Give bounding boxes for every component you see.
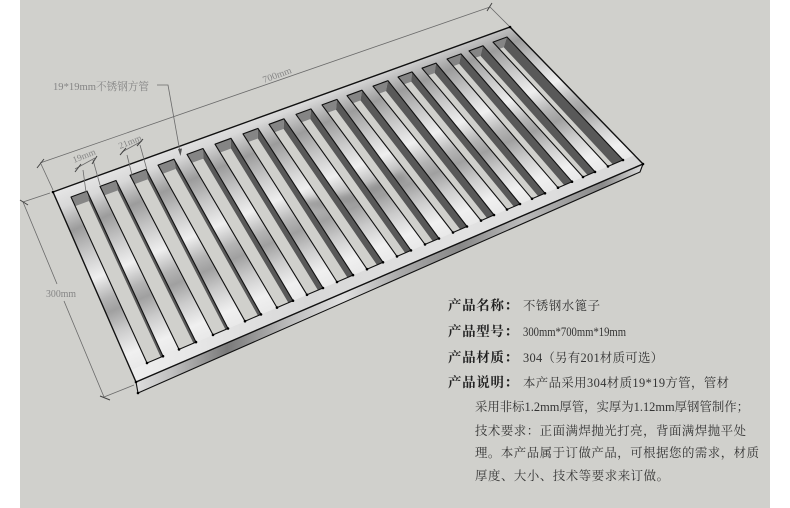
slot 17 (493, 37, 623, 166)
callout: tube size (53, 79, 182, 156)
slot 5 (187, 148, 293, 308)
slot 8 (269, 119, 383, 269)
grate top face (53, 27, 643, 382)
dimension: 300mm: 300mm (46, 289, 76, 300)
spec: model: 300mm*700mm*19mm (523, 325, 626, 339)
slot 15 (447, 54, 572, 188)
slot 6 (215, 138, 323, 295)
dimension: 19mm: 19mm (71, 147, 97, 165)
slot 4 (158, 159, 261, 321)
spec: model: 产品型号： (448, 323, 518, 339)
spec: description: 产品说明： (448, 374, 518, 390)
slot 7 (243, 128, 353, 282)
slot 16 (469, 46, 595, 177)
spec: name: 产品名称： (448, 297, 518, 313)
spec: name (448, 297, 600, 313)
slot 1 (71, 191, 163, 363)
grate corner points (53, 27, 643, 393)
arrow: tube leader (157, 85, 182, 156)
spec: material (448, 349, 663, 365)
grate bottom rail (131, 154, 643, 382)
slot 11 (347, 90, 467, 232)
spec: description: 本产品采用304材质19*19方管，管材 (523, 375, 729, 390)
slot 13 (398, 72, 520, 210)
dimension: 21mm: 21mm (117, 133, 143, 151)
dimension: 19mm (71, 147, 100, 192)
slot 3 (130, 169, 228, 335)
surface smudge (296, 176, 405, 206)
grate front side face (136, 164, 643, 393)
slot 9 (296, 109, 411, 256)
spec: name: 不锈钢水篦子 (523, 298, 600, 313)
grate outline (53, 27, 643, 382)
spec: description: 采用非标1.2mm厚管，实厚为1.12mm厚钢管制作； (475, 399, 749, 414)
slot 12 (373, 81, 494, 221)
product specification text (448, 297, 759, 483)
callout: tube size: 19*19mm不锈钢方管 (53, 79, 149, 93)
spec: material: 产品材质： (448, 349, 518, 365)
spec: material: 304（另有201材质可选） (523, 350, 663, 365)
dimension: 700mm (37, 3, 509, 190)
spec: description: 技术要求：正面满焊抛光打亮，背面满焊抛平处 (475, 423, 747, 438)
spec: description: 理。本产品属于订做产品，可根据您的需求，材质 (475, 445, 759, 460)
dimension: 700mm: 700mm (262, 66, 294, 86)
stainless steel grate drawing (53, 27, 643, 393)
slot 14 (422, 63, 545, 199)
spec: description: 厚度、大小、技术等要求来订做。 (475, 468, 669, 483)
dimension: 300mm (20, 193, 134, 400)
slot 2 (100, 180, 196, 349)
dimension: 21mm (117, 133, 147, 175)
spec: description (448, 374, 759, 483)
slot 10 (322, 99, 439, 244)
spec: model (448, 323, 626, 339)
